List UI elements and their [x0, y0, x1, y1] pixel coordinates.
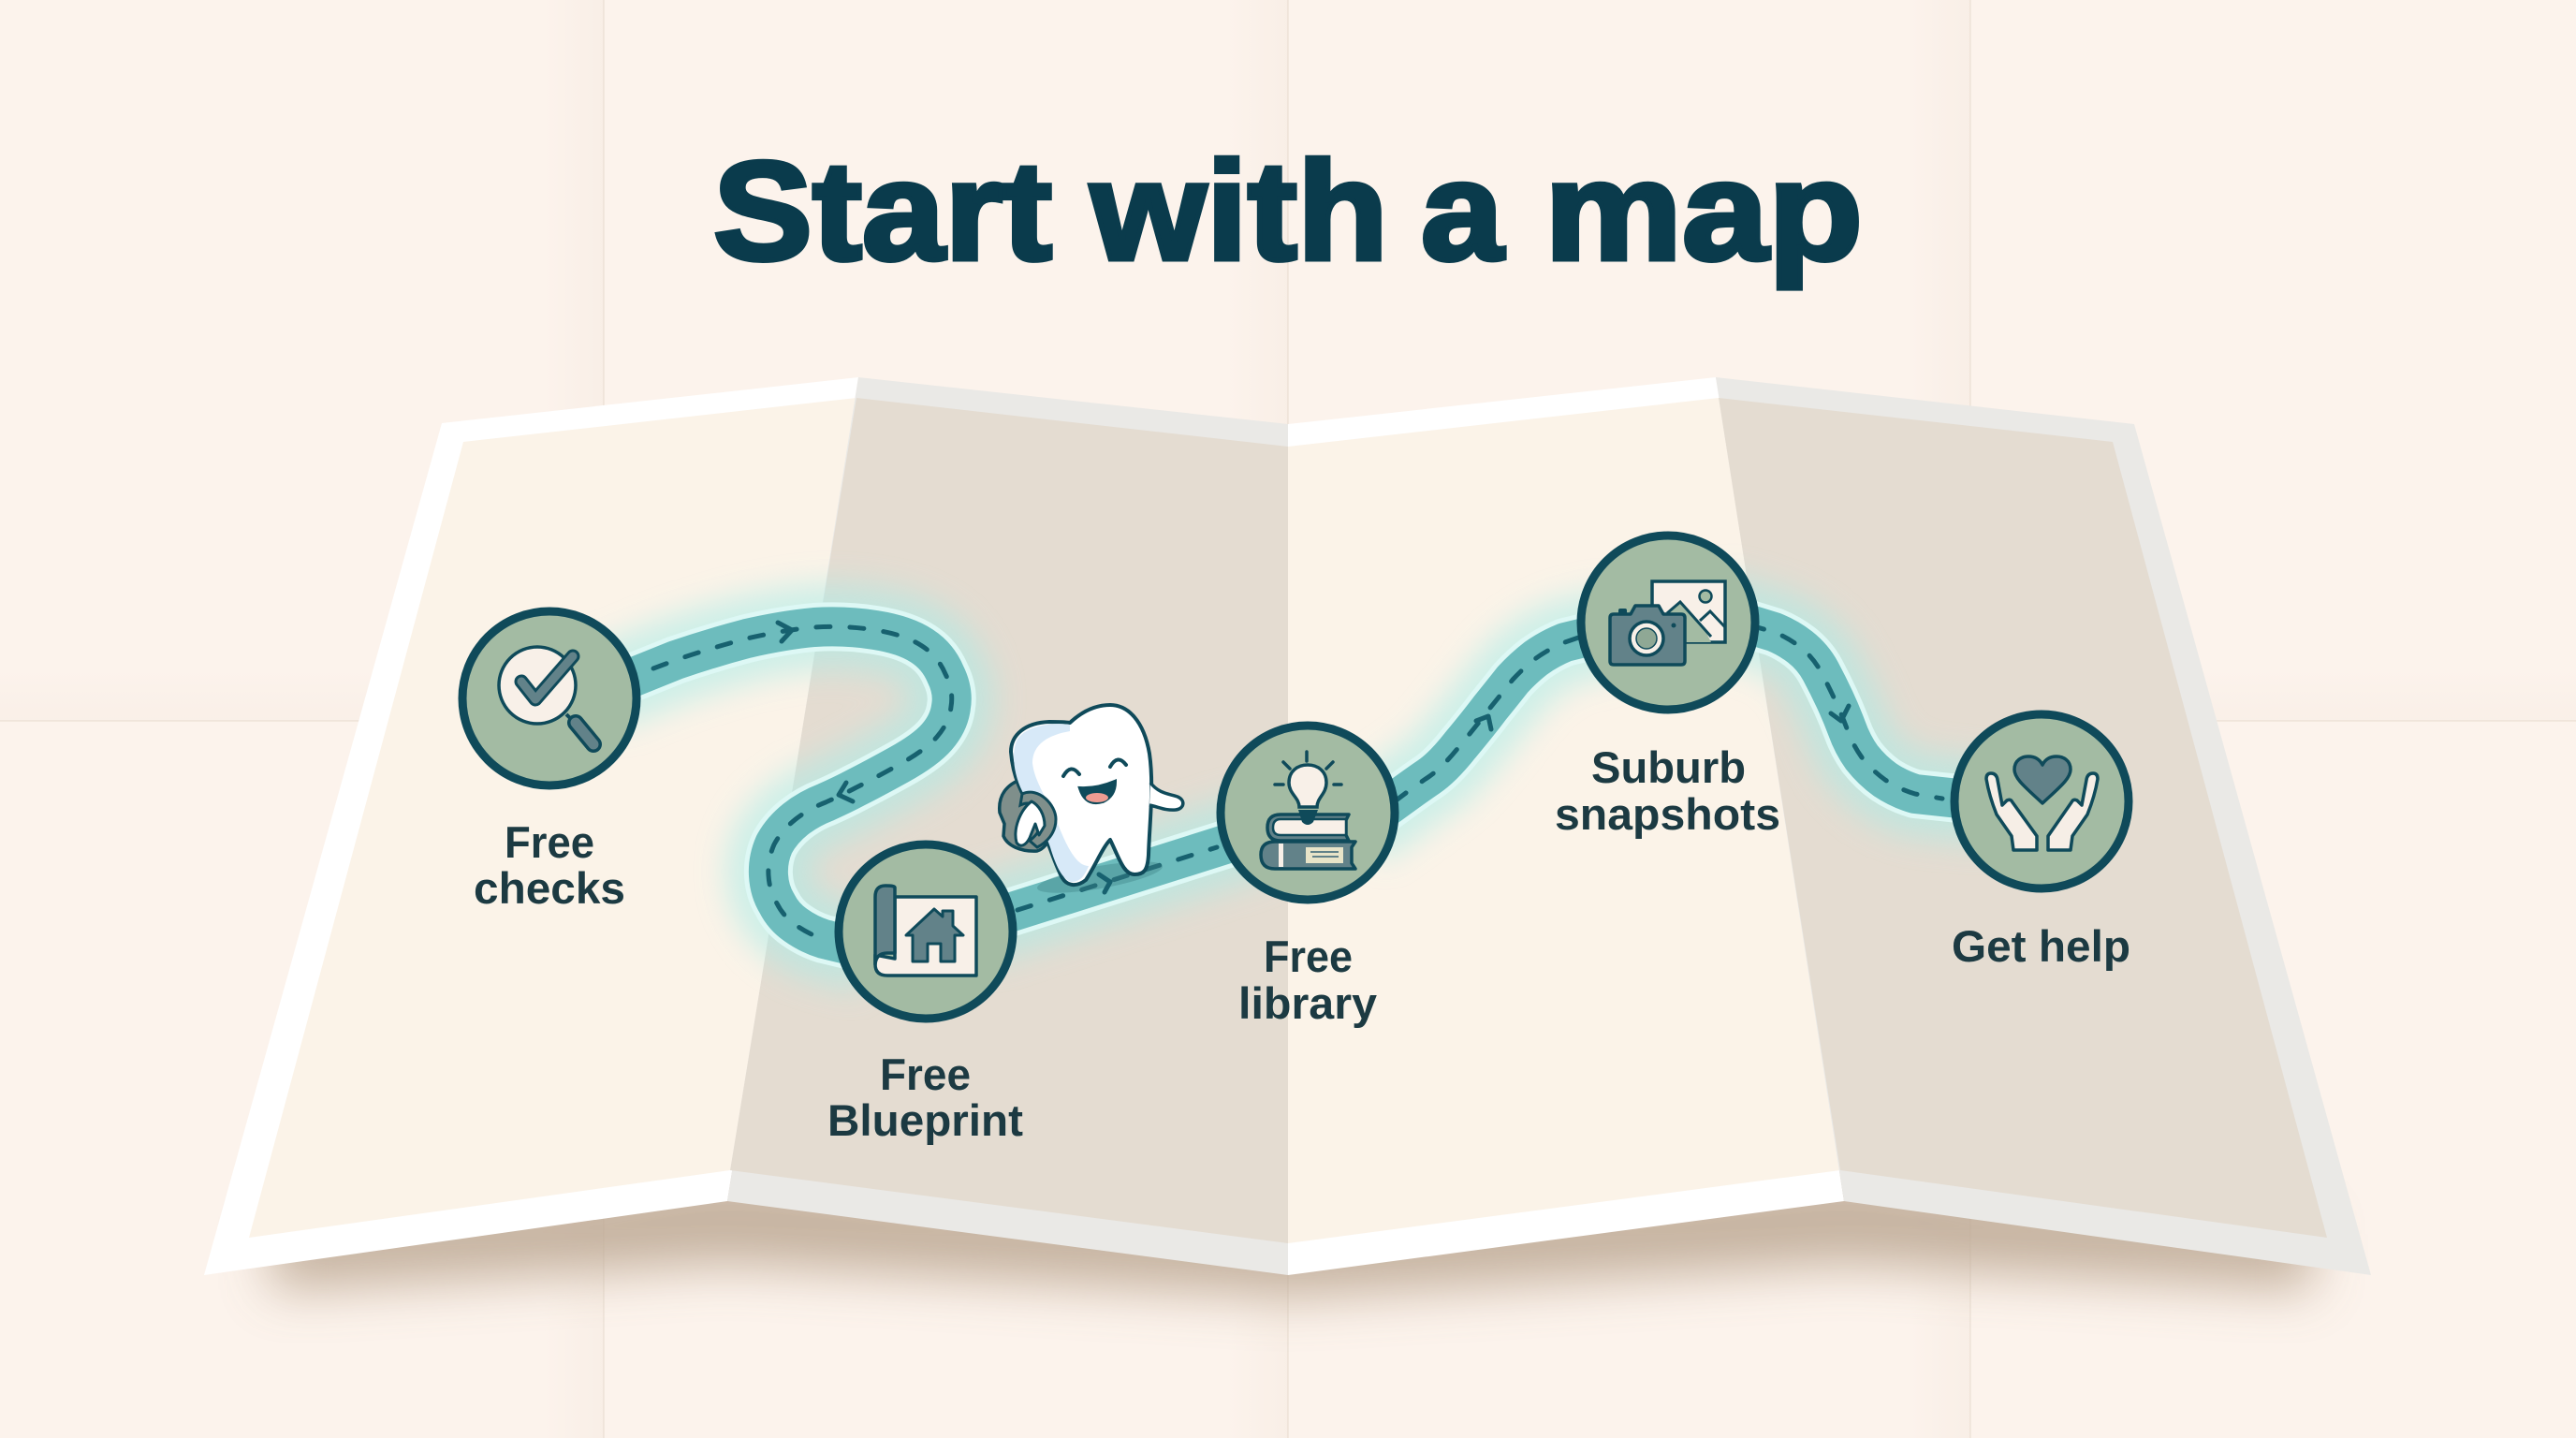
- label: get help: Get help: [1952, 921, 2130, 971]
- label: free checks: [474, 817, 625, 913]
- route direction arrows: [778, 623, 1849, 801]
- step 5: get help: [1952, 714, 2130, 971]
- route arrow in front of mascot shadow: [1099, 874, 1110, 892]
- step 3: free library: [1221, 726, 1395, 1028]
- folded map: [204, 377, 2371, 1275]
- label: suburb snapshots: [1555, 742, 1780, 839]
- label: free checks: Free: [505, 817, 594, 867]
- tongue: [1086, 793, 1108, 802]
- tooth shading: [1014, 724, 1089, 882]
- title: [713, 132, 1863, 289]
- panel: map fold 3: [1288, 377, 1844, 1275]
- backpack: [1000, 779, 1057, 851]
- mascot ground shadow: [1035, 855, 1164, 900]
- label: free blueprint: [827, 1049, 1023, 1145]
- title: a: [1421, 132, 1505, 289]
- label: suburb snapshots: Suburb: [1591, 742, 1746, 792]
- right arm: [1149, 783, 1183, 810]
- label: free library: [1238, 932, 1377, 1028]
- title: map: [1544, 132, 1863, 289]
- icon: books with light bulb: [1221, 726, 1395, 900]
- tooth body: [1011, 705, 1151, 885]
- label: free blueprint: Free: [880, 1049, 971, 1099]
- label: free blueprint: Blueprint: [827, 1095, 1023, 1145]
- title: Start: [713, 132, 1052, 289]
- left arm and strap: [1016, 792, 1056, 847]
- step 2: free blueprint: [827, 844, 1023, 1145]
- icon: camera and photo: [1581, 536, 1755, 710]
- icon: blueprint with house: [839, 844, 1013, 1019]
- label: suburb snapshots: snapshots: [1555, 789, 1780, 839]
- title: with: [1090, 132, 1388, 289]
- tooth mascot: [1000, 705, 1183, 900]
- step 1: free checks: [462, 611, 637, 913]
- label: free checks: checks: [474, 863, 625, 913]
- map shadow: [271, 1170, 2312, 1297]
- step 4: suburb snapshots: [1555, 536, 1780, 839]
- panel: map fold 1: [204, 377, 858, 1275]
- tooth face: [1063, 759, 1126, 802]
- label: free library: Free: [1264, 932, 1353, 981]
- icon: hands holding heart: [1954, 714, 2129, 888]
- icon: magnifier with check: [462, 611, 637, 785]
- panel: map fold 2: [727, 377, 1288, 1275]
- panel: map fold 4: [1716, 377, 2371, 1275]
- label: free library: library: [1238, 978, 1377, 1028]
- glowing route: [599, 613, 1994, 950]
